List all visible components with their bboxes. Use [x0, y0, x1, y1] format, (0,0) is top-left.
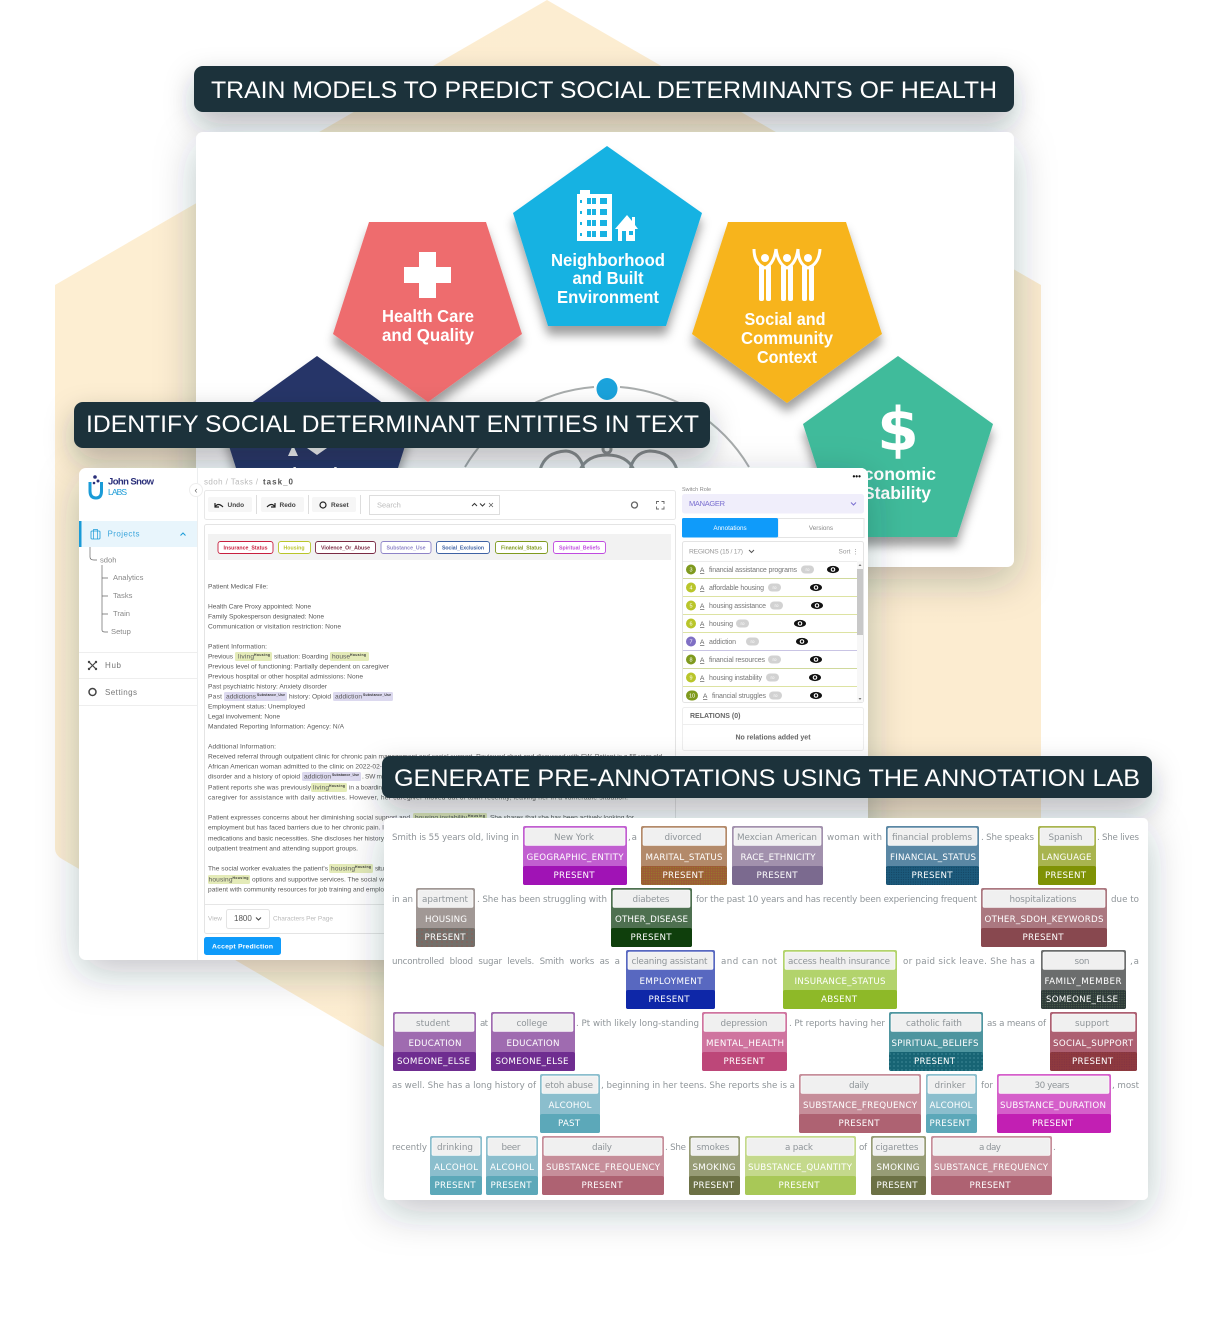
- document body: Housing: [468, 814, 485, 818]
- pentagon: Neighborhood and Built Environment: and Built: [572, 268, 644, 288]
- document body: Additional Information:: [208, 744, 276, 750]
- annotation: Spanish: LANGUAGE: [1042, 853, 1092, 863]
- annotation: son: FAMILY_MEMBER: [1044, 977, 1122, 987]
- collapse button: [190, 484, 202, 496]
- logo: John Snow Labs: John Snow: [108, 476, 155, 488]
- context text: . She speaks: [981, 833, 1034, 843]
- region rows: A: [700, 603, 705, 610]
- annotation: smokes: [689, 1136, 740, 1195]
- label pills: Violence_Or_Abuse: [321, 546, 370, 552]
- page size footer: [205, 904, 675, 928]
- annotation: hospitalizations: OTHER_SDOH_KEYWORDS: [984, 915, 1104, 925]
- region rows: financial assistance programs: [709, 567, 798, 574]
- document body: housing: [331, 866, 355, 872]
- annotation: a pack: [745, 1136, 856, 1195]
- annotation: smokes: PRESENT: [693, 1181, 735, 1191]
- right column: role, regions, relations: [682, 472, 864, 750]
- context text: . She: [665, 1143, 686, 1153]
- annotation: apartment: HOUSING: [425, 915, 467, 925]
- heading: identify entities: [74, 402, 710, 448]
- annotation: access health insurance: access health insurance: [788, 957, 890, 967]
- annotation: diabetes: OTHER_DISEASE: [615, 915, 688, 925]
- context text: , a: [628, 833, 637, 843]
- region rows: A: [700, 657, 705, 664]
- annotation: Spanish: Spanish: [1048, 833, 1082, 843]
- pentagon: Education: Education: [275, 464, 359, 484]
- label pills: Social_Exclusion: [442, 546, 484, 552]
- annotation: college: EDUCATION: [506, 1039, 560, 1049]
- annotation: Mexcian American: Mexcian American: [737, 833, 817, 843]
- annotation: a day: a day: [979, 1143, 1001, 1153]
- context text: . Pt reports having her: [789, 1019, 885, 1029]
- toolbar: Undo: [228, 502, 244, 509]
- pentagon: Neighborhood and Built Environment: [513, 146, 702, 326]
- context text: at: [480, 1019, 489, 1029]
- annotation: etoh abuse: ALCOHOL: [548, 1101, 592, 1111]
- document body: situ: [375, 866, 384, 872]
- document body: medications and basic necessities. She discloses her history: [208, 836, 385, 842]
- annotation: daily: SUBSTANCE_FREQUENCY: [803, 1101, 918, 1111]
- annotation: depression: [702, 1012, 787, 1071]
- document body: patient with community resources for job training and emplo: [208, 886, 384, 894]
- annotation: access health insurance: INSURANCE_STATUS: [794, 977, 886, 987]
- region rows: A: [700, 585, 705, 592]
- annotation: drinker: drinker: [934, 1081, 966, 1091]
- document body: Received referral through outpatient clinic for chronic pain management and social support. Reviewed chart and discussed with SW. Patient is a 55 year old: [208, 754, 662, 760]
- region rows: 6: [689, 622, 693, 628]
- context text: of: [859, 1143, 868, 1153]
- context text: . She has been struggling with: [477, 895, 607, 905]
- relations box: RELATIONS (0): [690, 713, 740, 720]
- annotation: Mexcian American: [732, 826, 823, 885]
- region rows: 9: [689, 676, 693, 682]
- toolbar: [204, 490, 676, 520]
- context text: as well. She has a long history of: [392, 1081, 537, 1091]
- heading: generate pre-annotations: GENERATE PRE-ANNOTATIONS USING THE ANNOTATION LAB: [394, 765, 1140, 792]
- regions list: REGIONS (15 / 17): [689, 548, 743, 556]
- document body: Legal involvement: None: [208, 714, 280, 720]
- region rows: 7: [689, 640, 693, 646]
- annotation: New York: PRESENT: [554, 871, 595, 881]
- annotation: catholic faith: PRESENT: [914, 1057, 956, 1067]
- annotation: cleaning assistant: EMPLOYMENT: [640, 977, 703, 987]
- annotation: son: son: [1074, 957, 1090, 967]
- annotation: college: college: [516, 1019, 548, 1029]
- region rows: 10: [689, 694, 695, 700]
- regions list: Sort ⋮: [838, 548, 859, 556]
- context text: .: [1053, 1143, 1056, 1153]
- annotation: 30 years: SUBSTANCE_DURATION: [1000, 1101, 1106, 1111]
- document body: addiction: [335, 694, 362, 700]
- logo: John Snow Labs: [90, 475, 155, 498]
- annotation: beer: ALCOHOL: [490, 1163, 534, 1173]
- annotation: student: [393, 1012, 476, 1071]
- heading: train models: [194, 66, 1014, 112]
- document body: Substance_Use: [363, 693, 391, 697]
- annotation: hospitalizations: [981, 888, 1107, 947]
- region rows: housing: [709, 621, 733, 628]
- pentagon: Economic Stability: [803, 356, 993, 537]
- pentagon: Social and Community Context: Context: [757, 347, 817, 367]
- document body: Housing: [254, 653, 270, 657]
- heading: generate pre-annotations: [382, 756, 1152, 798]
- panel: pre-annotated text: [384, 818, 1148, 1200]
- region rows: A: [700, 621, 705, 628]
- document body: Previous: [208, 654, 234, 660]
- context text: and can not: [721, 957, 778, 967]
- annotation: apartment: PRESENT: [424, 933, 466, 943]
- page size footer: 1800: [234, 914, 252, 923]
- region rows: 5: [689, 604, 693, 610]
- region rows: ro: [774, 603, 779, 608]
- document body: The social worker evaluates the patient's: [208, 866, 329, 872]
- annotation: divorced: PRESENT: [662, 871, 704, 881]
- annotation: a day: PRESENT: [970, 1181, 1011, 1191]
- annotation: drinking: drinking: [437, 1143, 473, 1153]
- annotation: access health insurance: ABSENT: [821, 995, 858, 1005]
- annotation: support: [1050, 1012, 1137, 1071]
- annotation: a pack: a pack: [785, 1143, 814, 1153]
- context text: [392, 833, 1140, 1153]
- annotation: depression: MENTAL_HEALTH: [706, 1039, 784, 1049]
- sidebar navigation: Setup: [111, 627, 131, 636]
- annotation: beer: beer: [502, 1143, 521, 1153]
- region rows: financial resources: [709, 657, 766, 664]
- button: accept prediction: [204, 937, 281, 955]
- context text: , a: [1130, 957, 1139, 967]
- breadcrumb: [204, 478, 294, 486]
- central circle with people: [465, 378, 749, 470]
- panel: social determinants pentagon diagram: [196, 132, 1014, 567]
- document body: Housing: [232, 876, 248, 880]
- tabs: Annotations: [713, 525, 747, 532]
- annotation: smokes: smokes: [696, 1143, 730, 1153]
- document body: outpatient treatment and attending support groups.: [208, 846, 358, 852]
- annotation: son: SOMEONE_ELSE: [1046, 995, 1118, 1005]
- region rows: [683, 564, 857, 700]
- region rows: ro: [772, 657, 777, 662]
- annotation: daily second: SUBSTANCE_FREQUENCY: [546, 1163, 661, 1173]
- context text: , beginning in her teens. She reports she is a: [601, 1081, 795, 1091]
- sidebar navigation: Analytics: [113, 573, 144, 582]
- annotation: drinker: PRESENT: [930, 1119, 971, 1129]
- toolbar: Redo: [280, 502, 296, 509]
- region rows: ro: [770, 675, 775, 680]
- document body: She shares that she has been actively looking for: [490, 814, 635, 822]
- annotation: diabetes: diabetes: [632, 895, 670, 905]
- annotation: access health insurance: [783, 950, 897, 1009]
- context text: . Pt with likely long-standing: [576, 1019, 699, 1029]
- annotation: New York: [523, 826, 627, 885]
- toolbar: Reset: [331, 502, 350, 509]
- annotation: New York: GEOGRAPHIC_ENTITY: [526, 853, 624, 863]
- document body: history: Opioid: [289, 694, 331, 700]
- annotation: 30 years: 30 years: [1034, 1081, 1070, 1091]
- annotation: depression: depression: [720, 1019, 768, 1029]
- annotation: Mexcian American: PRESENT: [756, 871, 798, 881]
- annotation: drinking: ALCOHOL: [434, 1163, 478, 1173]
- annotation: daily: daily: [849, 1081, 869, 1091]
- annotation: diabetes: [611, 888, 692, 947]
- annotation: drinking: [430, 1136, 482, 1195]
- sidebar navigation: Hub: [105, 661, 122, 670]
- document body: addictions: [226, 694, 257, 700]
- context text: in an: [392, 895, 413, 905]
- region rows: 3: [689, 568, 693, 574]
- region rows: financial struggles: [712, 693, 766, 700]
- pentagon: Education: [222, 356, 412, 537]
- annotation: drinker: [926, 1074, 977, 1133]
- annotation: student: EDUCATION: [408, 1039, 462, 1049]
- annotation: cigarettes: SMOKING: [876, 1163, 920, 1173]
- annotation: a pack: SUBSTANCE_QUANTITY: [748, 1163, 853, 1173]
- document body: Family Spokesperson designated: None: [208, 614, 324, 620]
- document body: Employment status: Unemployed: [208, 704, 305, 710]
- region rows: ro: [740, 621, 745, 626]
- document body: Mandated Reporting Information: Agency: N/A: [208, 724, 345, 730]
- pentagon: Economic Stability: Economic: [852, 464, 936, 484]
- annotation: daily: [799, 1074, 921, 1133]
- document body: Substance_Use: [332, 773, 359, 777]
- right column: role, regions, relations: •••: [852, 472, 861, 481]
- sidebar navigation: Settings: [105, 688, 137, 697]
- annotation: divorced: divorced: [664, 833, 702, 843]
- annotation: catholic faith: catholic faith: [906, 1019, 962, 1029]
- right column: role, regions, relations: Switch Role: [682, 487, 711, 493]
- region rows: A: [700, 675, 705, 682]
- region rows: 8: [689, 658, 693, 664]
- tabs: Versions: [809, 525, 833, 532]
- region rows: ro: [773, 693, 778, 698]
- document body: Communication or visitation restriction: None: [208, 624, 341, 630]
- context text: recently: [392, 1143, 427, 1153]
- document body: housing instability: [415, 814, 468, 822]
- panel: annotation lab screenshot: [79, 468, 868, 960]
- annotation: beer: [486, 1136, 538, 1195]
- context text: due to: [1111, 895, 1139, 905]
- breadcrumb: sdoh / Tasks /: [204, 478, 259, 486]
- document body: Patient expresses concerns about her diminishing social support and: [208, 814, 410, 822]
- region rows: 4: [689, 586, 693, 592]
- context text: as a means of: [987, 1019, 1047, 1029]
- pentagon: Neighborhood and Built Environment: Neighborhood: [551, 250, 665, 270]
- label pills: Insurance_Status: [224, 546, 268, 552]
- relations box: [682, 708, 864, 750]
- relations box: No relations added yet: [735, 734, 811, 742]
- toolbar: Search: [377, 500, 401, 510]
- annotation: etoh abuse: [540, 1074, 600, 1133]
- region rows: ro: [772, 585, 777, 590]
- annotation: etoh abuse: PAST: [558, 1119, 581, 1129]
- label pills: Financial_Status: [501, 546, 542, 552]
- annotation: drinking: PRESENT: [434, 1181, 476, 1191]
- annotation: beer: PRESENT: [490, 1181, 532, 1191]
- pentagon: Social and Community Context: [692, 222, 882, 403]
- context text: for the past 10 years and has recently been experiencing frequent: [696, 895, 978, 905]
- region rows: ro: [805, 567, 810, 572]
- document body: Past: [208, 694, 222, 700]
- sidebar navigation: Train: [113, 609, 130, 618]
- pentagon: Social and Community Context: Community: [741, 328, 833, 348]
- region rows: A: [700, 639, 705, 646]
- pentagon: Health Care and Quality: [333, 222, 522, 402]
- annotation: 30 years: PRESENT: [1032, 1119, 1074, 1129]
- page size footer: Characters Per Page: [273, 916, 333, 922]
- region rows: A: [703, 693, 708, 700]
- document body: Housing: [329, 784, 345, 788]
- annotation: cigarettes: PRESENT: [876, 1181, 918, 1191]
- annotation: college: [491, 1012, 575, 1071]
- context text: , most: [1112, 1081, 1140, 1091]
- annotation: college: SOMEONE_ELSE: [496, 1057, 568, 1067]
- document body: caregiver for assistance with daily activities. However, her caregiver moved out of town recently, leaving her in a vulnerable situation.: [208, 794, 628, 802]
- annotation: divorced: MARITAL_STATUS: [646, 853, 723, 863]
- button: accept prediction: Accept Prediction: [212, 944, 273, 950]
- collapse button: ‹: [194, 485, 198, 495]
- context text: uncontrolled blood sugar levels. Smith works as a: [392, 957, 620, 967]
- region rows: affordable housing: [709, 585, 764, 592]
- annotation: student: SOMEONE_ELSE: [397, 1057, 470, 1067]
- annotation: daily second: PRESENT: [582, 1181, 623, 1191]
- tabs: [682, 518, 864, 538]
- annotation: etoh abuse: etoh abuse: [545, 1081, 593, 1091]
- background hexagon: [55, 0, 1041, 1142]
- annotation: cleaning assistant: PRESENT: [648, 995, 690, 1005]
- annotation: support: SOCIAL_SUPPORT: [1053, 1039, 1134, 1049]
- annotation: divorced: [641, 826, 727, 885]
- document body: [208, 584, 662, 894]
- annotation: diabetes: PRESENT: [630, 933, 672, 943]
- document body: living: [313, 784, 329, 792]
- annotation: 30 years: [997, 1074, 1111, 1133]
- breadcrumb: task_0: [263, 478, 294, 486]
- document body: addiction: [304, 774, 331, 780]
- document body: Past psychiatric history: Anxiety disorder: [208, 684, 328, 690]
- annotation: a pack: PRESENT: [778, 1181, 820, 1191]
- document body: Previous level of functioning: Partially dependent on caregiver: [208, 664, 390, 670]
- context text: woman with: [827, 833, 882, 843]
- context text: Smith is 55 years old, living in: [392, 833, 519, 843]
- document body: situation: Boarding: [274, 654, 328, 660]
- annotation: smokes: SMOKING: [692, 1163, 736, 1173]
- context text: or paid sick leave. She has a: [903, 957, 1035, 967]
- region rows: A: [700, 567, 705, 574]
- document body: housing: [208, 876, 233, 884]
- annotation: financial problems: PRESENT: [912, 871, 953, 881]
- label pills: Substance_Use: [386, 546, 426, 552]
- annotation: drinker: ALCOHOL: [930, 1101, 973, 1111]
- sidebar navigation: [79, 521, 197, 706]
- document body: living: [238, 654, 254, 660]
- annotation: daily second: [542, 1136, 664, 1195]
- document body: African American woman admitted to the clinic on 2022-02-: [208, 764, 382, 770]
- document text panel: [204, 524, 676, 934]
- annotation: cigarettes: cigarettes: [876, 1143, 919, 1153]
- annotation: a day: SUBSTANCE_FREQUENCY: [934, 1163, 1049, 1173]
- right column: role, regions, relations: MANAGER: [689, 499, 726, 508]
- annotation: New York: New York: [554, 833, 595, 843]
- annotation: Spanish: PRESENT: [1045, 871, 1087, 881]
- document body: Patient reports she was previously: [208, 784, 312, 792]
- annotation: hospitalizations: PRESENT: [1022, 933, 1064, 943]
- regions list: [682, 542, 864, 702]
- label pills: [208, 534, 671, 560]
- document body: options and supportive services. The social w: [252, 876, 384, 884]
- document body: Previous hospital or other hospital admissions: None: [208, 674, 363, 680]
- document body: disorder and a history of opioid: [208, 774, 300, 780]
- sidebar navigation: Tasks: [113, 591, 133, 600]
- annotation: catholic faith: SPIRITUAL_BELIEFS: [892, 1039, 979, 1049]
- document body: . SW m: [362, 774, 382, 780]
- sidebar navigation: sdoh: [100, 556, 116, 564]
- pentagon: Social and Community Context: Social and: [744, 309, 826, 329]
- page size footer: View: [208, 916, 222, 922]
- annotation: apartment: [416, 888, 475, 947]
- document body: Substance_Use: [257, 693, 285, 697]
- annotation: son: [1041, 950, 1126, 1009]
- annotation: financial problems: [886, 826, 979, 885]
- annotation: financial problems: FINANCIAL_STATUS: [890, 853, 976, 863]
- context text: . She lives: [1097, 833, 1139, 843]
- annotation: depression: PRESENT: [724, 1057, 765, 1067]
- pentagon: Economic Stability: Stability: [863, 483, 931, 503]
- region rows: housing instability: [709, 675, 762, 682]
- annotation: support: PRESENT: [1072, 1057, 1114, 1067]
- pentagon: Neighborhood and Built Environment: Environment: [557, 287, 659, 307]
- document body: Health Care Proxy appointed: None: [208, 604, 311, 610]
- label pills: Housing: [284, 546, 304, 552]
- document body: in a boardin: [349, 784, 382, 792]
- annotation: catholic faith: [889, 1012, 983, 1071]
- document body: employment but has faced barriers due to her chronic pain. I: [208, 824, 384, 832]
- document body: Patient Medical File:: [208, 584, 268, 590]
- annotation: hospitalizations: hospitalizations: [1010, 895, 1077, 905]
- annotation: daily second: daily: [592, 1143, 612, 1153]
- annotation: support: support: [1075, 1019, 1110, 1029]
- pentagon: Economic Stability: $: [877, 395, 919, 465]
- region rows: addiction: [709, 639, 736, 646]
- document body: Housing: [355, 865, 371, 869]
- annotation: Mexcian American: RACE_ETHNICITY: [740, 853, 816, 863]
- annotation: student: student: [416, 1019, 451, 1029]
- heading: identify entities: IDENTIFY SOCIAL DETERMINANT ENTITIES IN TEXT: [86, 411, 699, 438]
- annotation: cleaning assistant: [626, 950, 715, 1009]
- heading: train models: TRAIN MODELS TO PREDICT SOCIAL DETERMINANTS OF HEALTH: [211, 77, 997, 104]
- logo: John Snow Labs: LABS: [108, 487, 127, 497]
- region rows: ro: [750, 639, 755, 644]
- region rows: housing assistance: [709, 603, 766, 610]
- document body: Housing: [350, 653, 366, 657]
- label pills: Spiritual_Beliefs: [559, 546, 600, 552]
- pentagon: Health Care and Quality: and Quality: [382, 325, 474, 345]
- document body: Patient Information:: [208, 644, 267, 650]
- annotation: Spanish: [1038, 826, 1096, 885]
- annotation: daily: PRESENT: [838, 1119, 880, 1129]
- annotation: apartment: apartment: [422, 895, 469, 905]
- annotation: cigarettes: [871, 1136, 926, 1195]
- context text: for: [981, 1081, 993, 1091]
- annotation: a day: [931, 1136, 1052, 1195]
- document body: house: [332, 654, 350, 660]
- pentagon: Health Care and Quality: Health Care: [382, 306, 474, 326]
- annotation: cleaning assistant: cleaning assistant: [632, 957, 708, 967]
- annotation: financial problems: financial problems: [892, 833, 972, 843]
- sidebar navigation: Projects: [108, 530, 140, 538]
